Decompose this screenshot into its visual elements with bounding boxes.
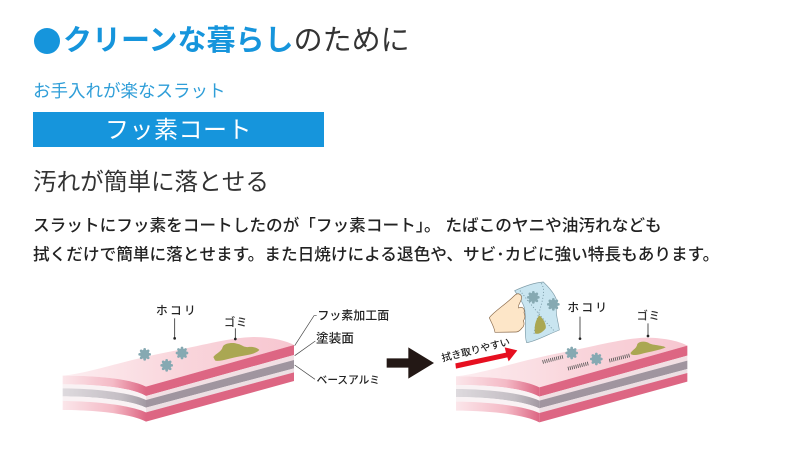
subtitle: お手入れが楽なスラット (33, 81, 226, 101)
dust particles (565, 347, 603, 365)
cloth (515, 282, 560, 343)
slab layers (456, 338, 687, 422)
hand (489, 294, 525, 332)
label: フッ素加工面: フッ素加工面 (317, 309, 389, 323)
label: ゴミ: ゴミ (637, 308, 661, 322)
label: 拭き取りやすい: 拭き取りやすい (440, 335, 511, 365)
body text: 拭くだけで簡単に落とせます。また日焼けによる退色や、サビ･カビに強い特長もあります。 (33, 245, 719, 264)
banner: フッ素コート: フッ素コート (105, 117, 252, 144)
label: 塗装面: 塗装面 (316, 331, 354, 345)
label: ホコリ (156, 304, 198, 340)
label: ゴミ: ゴミ (224, 315, 248, 329)
title: クリーンな暮らしのために (63, 25, 410, 57)
label: ゴミ (224, 315, 248, 340)
heading: 汚れが簡単に落とせる: 汚れが簡単に落とせる (33, 170, 269, 196)
dirt blob (631, 342, 666, 355)
body text: スラットにフッ素をコートしたのが「フッ素コート」。 たばこのヤニや油汚れなども (33, 216, 662, 235)
label: 塗装面 (295, 331, 354, 356)
motion lines (543, 355, 630, 369)
left diagram: slab before wiping (63, 304, 389, 422)
right diagram: slab after wiping (387, 282, 687, 422)
body text (33, 216, 719, 264)
label: ベースアルミ (295, 365, 380, 387)
title bullet (34, 28, 60, 54)
label: ゴミ (637, 308, 661, 337)
banner: フッ素コート (33, 112, 324, 147)
label: ホコリ: ホコリ (156, 304, 198, 317)
red arrow (455, 347, 517, 369)
black arrow (387, 347, 434, 379)
label: ホコリ: ホコリ (567, 301, 609, 314)
label: ベースアルミ: ベースアルミ (317, 375, 380, 387)
dust particles (138, 347, 188, 372)
label: フッ素加工面 (295, 309, 389, 346)
label: ホコリ (567, 301, 609, 340)
slab layers (63, 337, 294, 422)
dirt blob (213, 343, 259, 361)
